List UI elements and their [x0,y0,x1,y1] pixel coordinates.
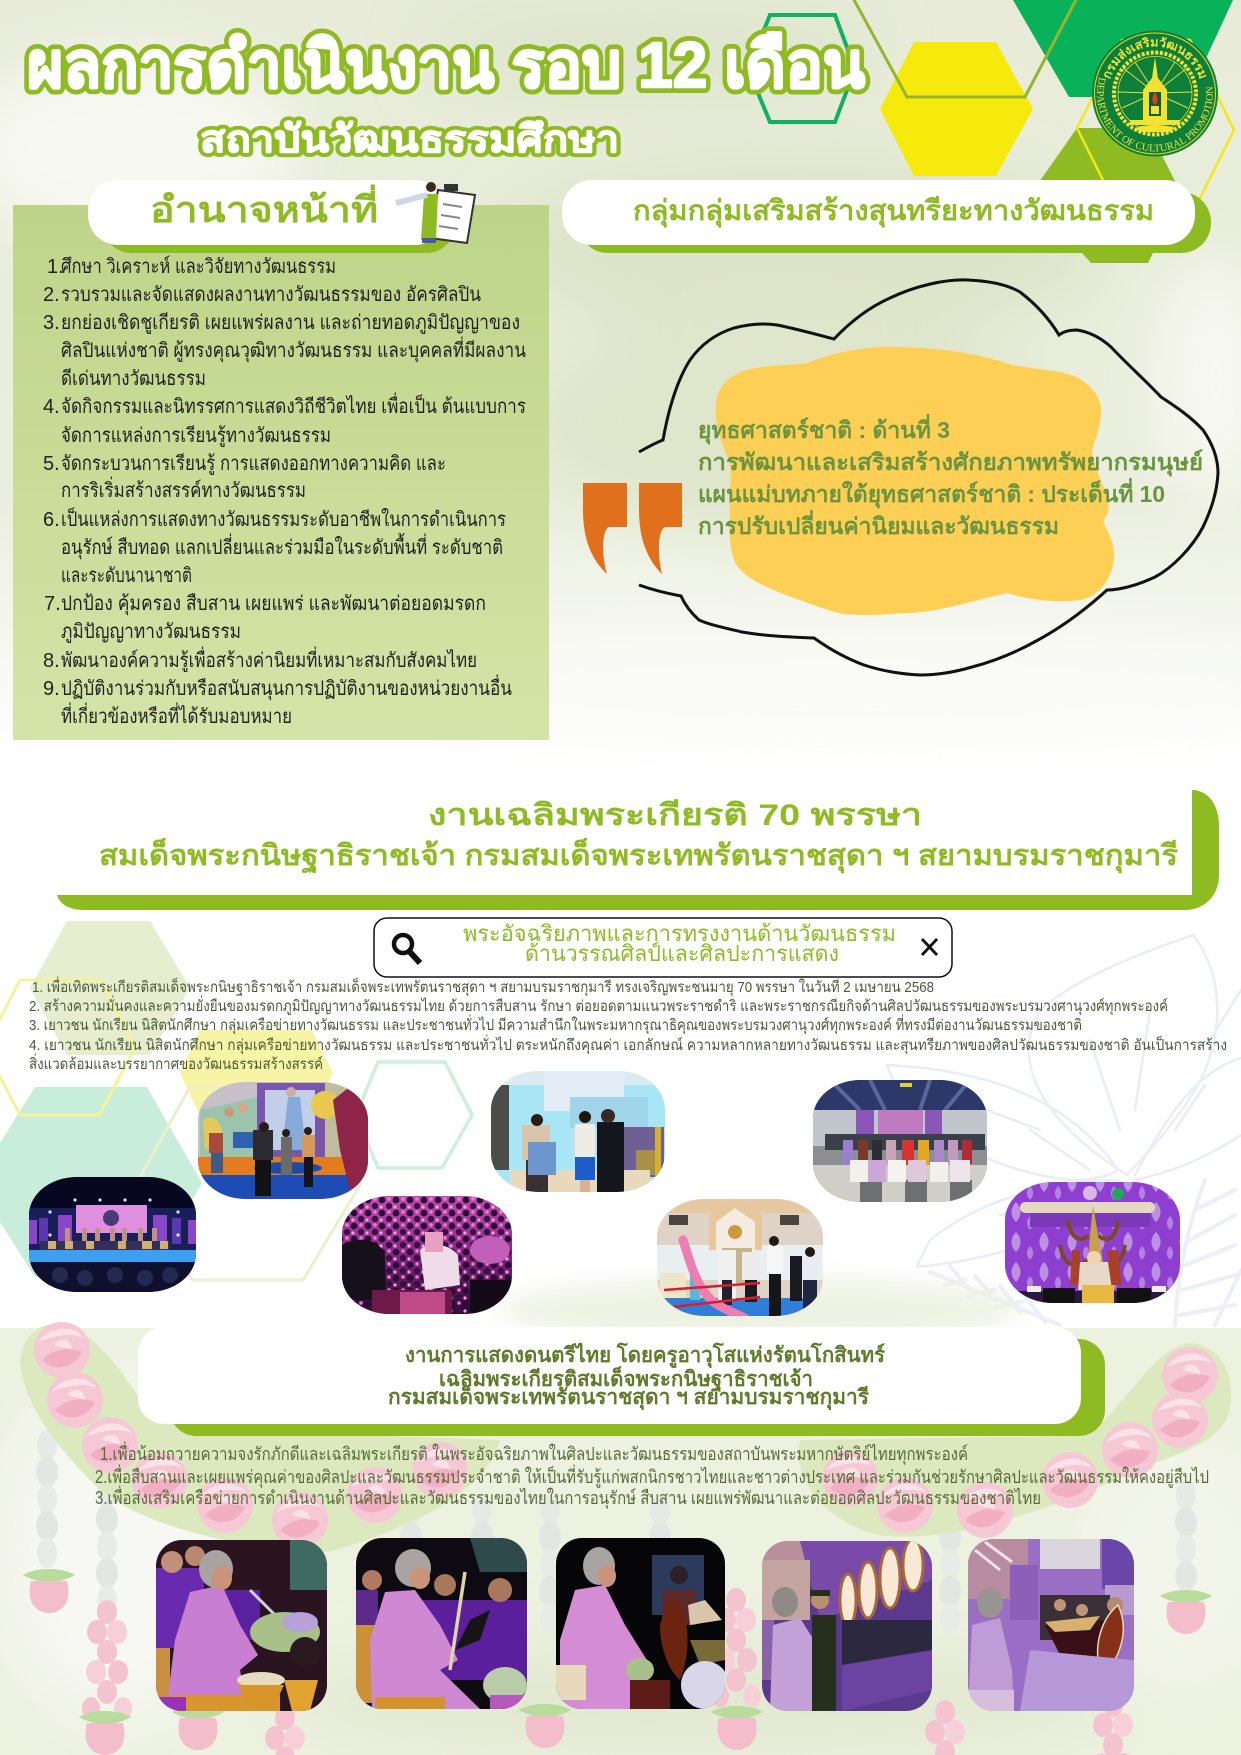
logo: Department of Cultural Promotion seal: กรมส่งเสริมวัฒนธรรม [1104,36,1206,79]
list: duties: รวบรวมและจัดแสดงผลงานทางวัฒนธรรมของ อัครศิลปิน [61,284,481,306]
photo: students presenting paintings [491,1071,665,1192]
photo: stage performance [29,1177,196,1292]
list: duties: อนุรักษ์ สืบทอด แลกเปลี่ยนและร่วมมือในระดับพื้นที่ ระดับชาติ [61,533,503,560]
photo: exhibition booth [198,1082,368,1199]
garland swag right [798,1343,1231,1537]
heading pill: duties [88,180,456,253]
list: duties: ภูมิปัญญาทางวัฒนธรรม [61,621,241,644]
background: pale palm leaves [930,1180,1241,1325]
list: duties: ปกป้อง คุ้มครอง สืบสาน เผยแพร่ และพัฒนาต่อยอดมรดก [61,593,486,616]
list: duties: ศิลปินแห่งชาติ ผู้ทรงคุณวุฒิทางวัฒนธรรม และบุคคลที่มีผลงาน [61,336,526,363]
text block: objectives of anniversary: 3. เยาวชน นักเรียน นิสิตนักศึกษา กลุ่มเครือข่ายทางวัฒนธรรม และประชาชนทั่วไป มีความสำนึกในพระมหากรุณาธิคุณของพระบรมวงศานุวงศ์ทุกพระองค์ ที่ทรงมีต่องานวัฒนธรรมของชาติ [29,1014,1082,1035]
list: duties: 1. [47,256,64,278]
heading pill: group name [562,180,1211,253]
photo: princess viewing exhibit wall [762,1539,932,1711]
list: duties: 5. [43,453,60,475]
list: duties: ยกย่องเชิดชูเกียรติ เผยแพร่ผลงาน และถ่ายทอดภูมิปัญญาของ [61,312,520,335]
icon: quotation marks [583,483,682,574]
icon: close [922,939,937,955]
text block: objectives of music performance: 1.เพื่อน้อมถวายความจงรักภักดีและเฉลิมพระเกียรติ ในพระอัจฉริยภาพในศิลปะและวัฒนธรรมของสถาบันพระมหากษัตริย์ไทยทุกพระองค์ [100,1441,968,1465]
hanging strands [23,1430,1212,1755]
text block: objectives of music performance [95,1441,1209,1509]
list: duties: ดีเด่นทางวัฒนธรรม [61,368,206,390]
photo: group on stage [813,1080,987,1202]
list: duties: จัดกระบวนการเรียนรู้ การแสดงออกทางความคิด และ [61,453,446,476]
banner: Thai music performance: กรมสมเด็จพระเทพรัตนราชสุดา ฯ สยามบรมราชกุมารี [388,1383,870,1411]
garland decoration [20,1322,1231,1755]
icon: person with clipboard [396,182,475,243]
photo: khon dancer [1005,1182,1180,1303]
panel: duties [13,180,549,740]
list: duties [43,255,526,728]
garland roses [34,1322,1218,1548]
logo: Department of Cultural Promotion seal: DEPARTMENT OF CULTURAL PROMOTION [1096,77,1214,152]
strategy text: การปรับเปลี่ยนค่านิยมและวัฒนธรรม [698,509,1059,539]
photo: princess with offering table [156,1540,327,1711]
text block: objectives of anniversary [29,976,1227,1073]
list: duties: การริเริ่มสร้างสรรค์ทางวัฒนธรรม [61,476,306,502]
list: duties: พัฒนาองค์ความรู้เพื่อสร้างค่านิยมที่เหมาะสมกับสังคมไทย [61,646,477,673]
banner: Thai music performance [138,1327,1105,1436]
list: duties: ที่เกี่ยวข้องหรือที่ได้รับมอบหมาย [61,702,292,728]
heading pill: group name: กลุ่มกลุ่มเสริมสร้างสุนทรียะทางวัฒนธรรม [633,195,1154,228]
callout: national strategy quote [583,280,1218,675]
list: duties: 4. [43,396,60,418]
icon: magnifier [394,935,420,963]
list: duties: 6. [43,509,60,531]
text block: objectives of anniversary: สิ่งแวดล้อมและบรรยากาศของวัฒนธรรมสร้างสรรค์ [29,1053,323,1073]
background: pale lotus leaf outlines [887,935,1241,1267]
list: duties: จัดการแหล่งการเรียนรู้ทางวัฒนธรรม [61,425,331,448]
hexagon decorations: top right [748,0,1234,263]
photo: princess playing saw [356,1538,527,1709]
list: duties: 3. [43,312,60,334]
photo: princess at instrument display [968,1539,1134,1711]
search box heading [374,918,952,977]
banner: Thai music performance: งานการแสดงดนตรีไทย โดยครูอาวุโสแห่งรัตนโกสินทร์ [405,1342,886,1369]
photo: hall visitors [657,1198,823,1318]
list: duties: และระดับนานาชาติ [61,565,192,587]
list: duties: 8. [43,650,60,672]
photo: princess playing khim [556,1538,729,1709]
list: duties: จัดกิจกรรมและนิทรรศการแสดงวิถีชีวิตไทย เพื่อเป็น ต้นแบบการ [61,392,526,418]
subtitle: สถาบันวัฒนธรรมศึกษา [200,119,619,161]
list: duties: เป็นแหล่งการแสดงทางวัฒนธรรมระดับอาชีพในการดำเนินการ [61,506,506,531]
title: ผลการดำเนินงาน รอบ 12 เดือน [27,29,865,101]
logo: Department of Cultural Promotion seal [1092,30,1218,156]
banner: 70th anniversary: งานเฉลิมพระเกียรติ 70 พรรษา [428,799,922,832]
list: duties: ปฏิบัติงานร่วมกับหรือสนับสนุนการปฏิบัติงานของหน่วยงานอื่น [61,674,512,701]
photo: audience crowd [342,1196,512,1314]
heading pill: duties: อำนาจหน้าที่ [150,184,378,230]
list: duties: 9. [43,678,60,700]
strategy text: การพัฒนาและเสริมสร้างศักยภาพทรัพยากรมนุษย์ [698,449,1203,477]
list: duties: 7. [44,593,61,615]
speech cloud outline [639,280,1218,675]
banner: Thai music performance: เฉลิมพระเกียรติสมเด็จพระกนิษฐาธิราชเจ้า [439,1365,813,1393]
title: ผลการดำเนินงาน รอบ 12 เดือน [27,29,865,101]
garland swag left [20,1324,500,1552]
subtitle: สถาบันวัฒนธรรมศึกษา [200,119,619,161]
background: white middle section [0,770,1241,1330]
background: watercolor wash top [0,0,1241,820]
yellow blob [716,347,1114,615]
list: duties: 2. [43,284,60,306]
strategy text [698,413,1203,539]
search box heading: ด้านวรรณศิลป์และศิลปะการแสดง [525,941,839,966]
banner: 70th anniversary: สมเด็จพระกนิษฐาธิราชเจ้า กรมสมเด็จพระเทพรัตนราชสุดา ฯ สยามบรมราชกุมารี [99,837,1178,874]
strategy text: ยุทธศาสตร์ชาติ : ด้านที่ 3 [698,413,950,445]
banner: 70th anniversary [57,790,1219,910]
background: pale green lower section [0,1278,1241,1755]
text block: objectives of music performance: 3.เพื่อส่งเสริมเครือข่ายการดำเนินงานด้านศิลปะและวัฒนธรรมของไทยในการอนุรักษ์ สืบสาน เผยแพร่พัฒนาและต่อยอดศิลปะวัฒนธรรมของชาติไทย [95,1485,1041,1509]
list: duties: ศึกษา วิเคราะห์ และวิจัยทางวัฒนธรรม [61,255,336,278]
text block: objectives of anniversary: 1. เพื่อเทิดพระเกียรติสมเด็จพระกนิษฐาธิราชเจ้า กรมสมเด็จพระเทพรัตนราชสุดา ฯ สยามบรมราชกุมารี ทรงเจริญพระชนมายุ 70 พรรษา ในวันที่ 2 เมษายน 2568 [32,976,934,997]
search box heading: พระอัจฉริยภาพและการทรงงานด้านวัฒนธรรม [463,921,896,946]
strategy text: แผนแม่บทภายใต้ยุทธศาสตร์ชาติ : ประเด็นที่ 10 [698,477,1165,509]
hexagon decorations: middle left [0,921,472,1280]
